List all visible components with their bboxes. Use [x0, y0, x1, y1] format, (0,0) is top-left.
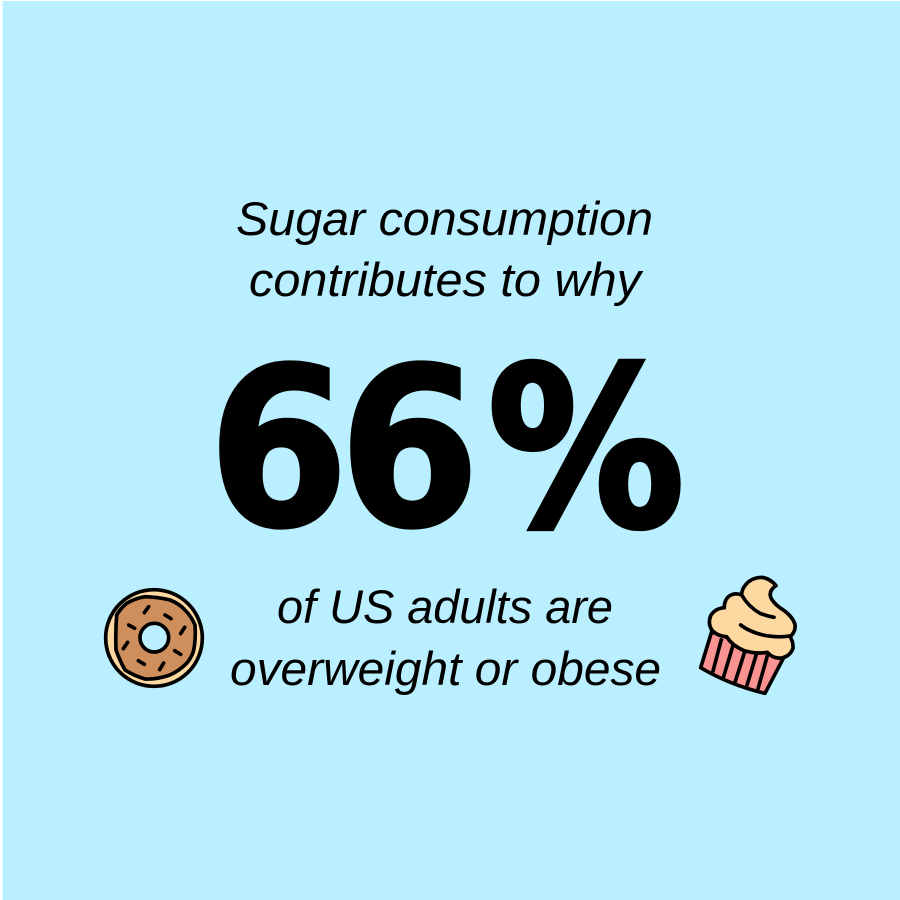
heading: sugar consumption statement: Sugar consumption — [236, 192, 653, 245]
icon: donut — [106, 590, 202, 686]
heading: sugar consumption statement — [236, 192, 653, 306]
big statistic: 66%: % — [488, 322, 684, 578]
big statistic: 66%: 6 — [208, 321, 349, 577]
big statistic: 66%: 6 — [339, 321, 480, 577]
text block: of US adults are overweight or obese — [230, 580, 661, 695]
text block: of US adults are overweight or obese: of US adults are — [277, 580, 613, 633]
text block: of US adults are overweight or obese: overweight or obese — [230, 642, 661, 695]
icon: cupcake — [701, 577, 795, 693]
heading: sugar consumption statement: contributes to why — [249, 253, 644, 306]
big statistic: 66% — [208, 321, 684, 578]
